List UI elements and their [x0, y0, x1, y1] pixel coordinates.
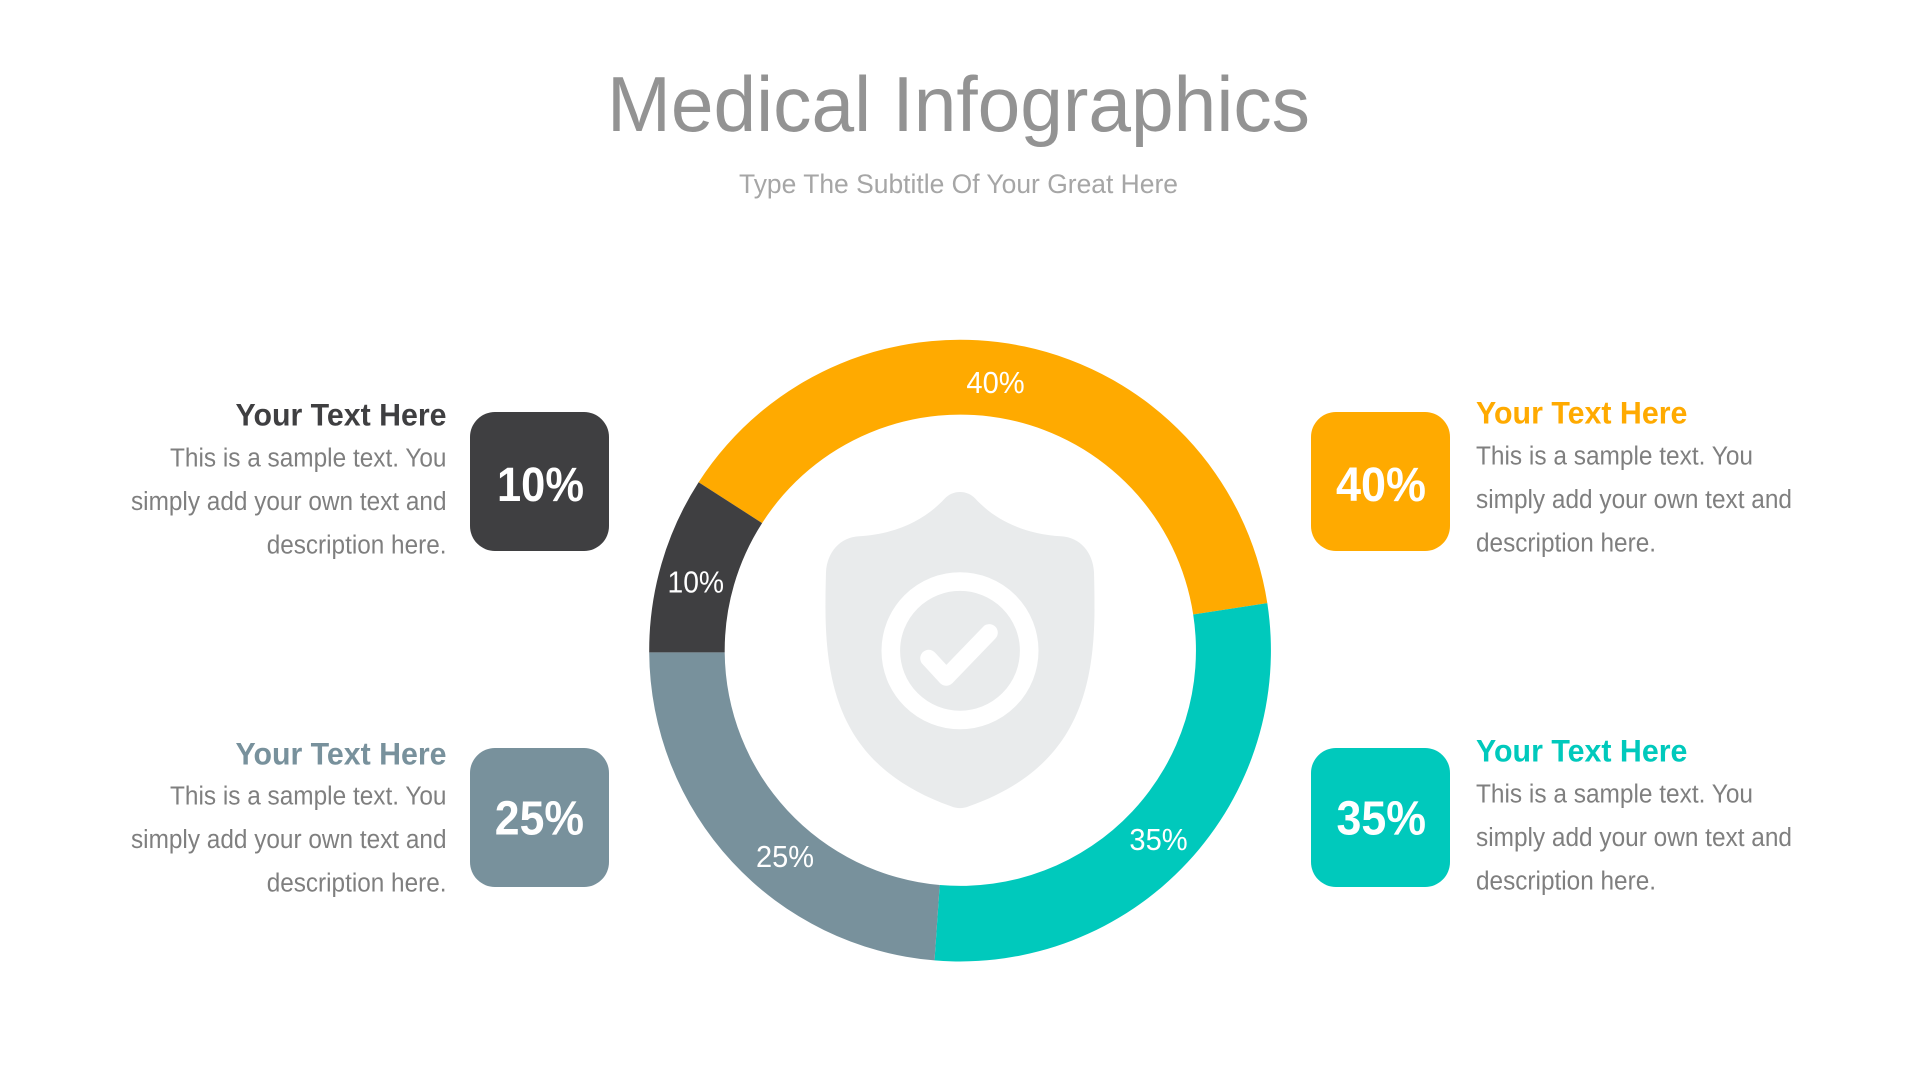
description text: description here. — [1476, 867, 1656, 895]
badge — [1311, 748, 1450, 887]
badge: 40% — [1336, 459, 1426, 512]
panel: 35% teal — [1311, 733, 1792, 895]
badge — [470, 748, 609, 887]
label: 10%: 10% — [668, 565, 724, 600]
description text: description here. — [267, 869, 446, 897]
subtitle: Type The Subtitle Of Your Great Here — [739, 169, 1178, 199]
description text: This is a sample text. You — [1476, 442, 1753, 470]
label: 35%: 35% — [1129, 822, 1188, 857]
segment: 40% orange — [699, 340, 1267, 614]
badge: 25% — [495, 792, 584, 846]
description text: simply add your own text and — [1476, 486, 1792, 514]
label: 40%: 40% — [966, 365, 1025, 400]
donut chart — [649, 340, 1271, 961]
badge — [1311, 412, 1450, 551]
description text: This is a sample text. You — [170, 783, 446, 811]
segment: 35% teal — [934, 603, 1271, 961]
description text: description here. — [1476, 529, 1656, 557]
heading: Your Text Here — [1476, 394, 1687, 430]
description text — [1476, 442, 1792, 557]
description text — [131, 783, 446, 897]
badge: 10% — [497, 459, 584, 512]
description text: This is a sample text. You — [1476, 780, 1753, 808]
badge — [470, 412, 609, 551]
description text: This is a sample text. You — [170, 445, 446, 473]
description text: simply add your own text and — [131, 488, 446, 516]
description text: simply add your own text and — [131, 826, 446, 854]
segment: 10% dark — [649, 482, 762, 652]
description text: simply add your own text and — [1476, 824, 1792, 852]
panel: 25% grey-blue — [131, 736, 609, 897]
segment: 25% grey-blue — [649, 652, 940, 960]
badge: 35% — [1336, 792, 1426, 846]
heading: Your Text Here — [236, 736, 446, 772]
label: 25%: 25% — [756, 839, 814, 874]
panel: 40% orange — [1311, 394, 1792, 557]
heading: Your Text Here — [236, 397, 446, 433]
icon: shield with check mark — [826, 492, 1094, 808]
title: Medical Infographics — [607, 60, 1310, 148]
panel: 10% dark — [131, 397, 609, 559]
heading: Your Text Here — [1476, 733, 1687, 769]
description text — [131, 445, 446, 559]
description text — [1476, 780, 1792, 895]
description text: description here. — [267, 531, 446, 559]
